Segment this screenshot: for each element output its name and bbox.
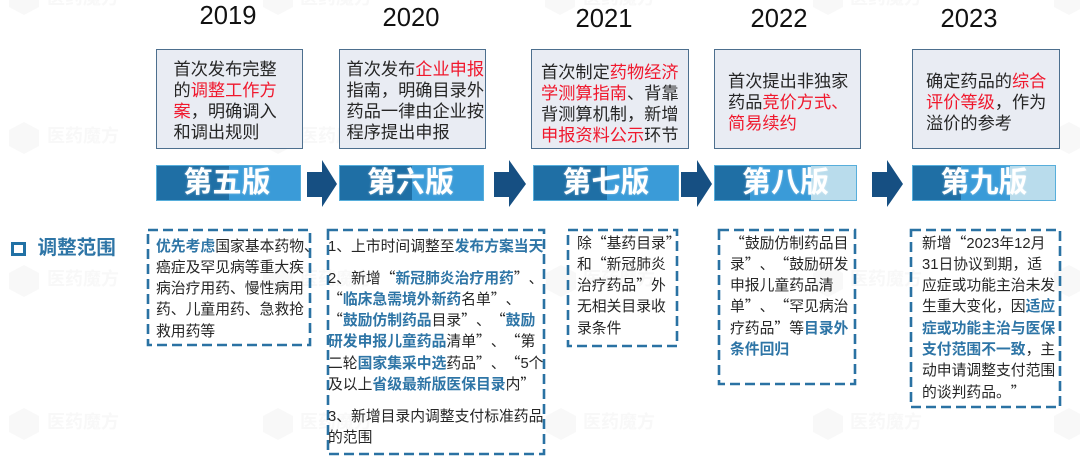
- panel: 第九版 scope: 生重大变化，因适应: [922, 299, 1055, 315]
- watermark pattern: 医药魔方: [583, 411, 655, 432]
- panel: 第九版 scope: 31日协议到期，适: [922, 257, 1042, 273]
- panel: 2020 description: 指南，明确目录外: [346, 80, 484, 100]
- banner: 第八版: [714, 165, 857, 201]
- panel: 2022 description: [714, 49, 861, 149]
- panel: 2022 description: 首次提出非独家: [728, 71, 848, 91]
- panel: 第九版 scope: 应症或功能主治未发: [922, 278, 1055, 294]
- banner: 第九版: 第九版: [940, 167, 1028, 199]
- panel: 第九版 scope: 症或功能主治与医保: [922, 321, 1055, 337]
- panel: 2019 description: 首次发布完整: [174, 58, 277, 78]
- arrow: 第六版 to 第七版: [494, 160, 526, 207]
- panel: 第八版 scope: “鼓励仿制药品目: [730, 232, 848, 252]
- panel: 第六版 scope: 及以上省级最新版医保目录内”: [328, 373, 535, 394]
- panel: 2020 description: 程序提出申报: [346, 122, 450, 142]
- panel: 第六版 scope: 1、上市时间调整至发布方案当天: [328, 238, 543, 254]
- banner: 第六版: 第六版: [367, 167, 454, 199]
- panel: 2023 description: 溢价的参考: [926, 113, 1012, 133]
- panel: 第六版 scope: 的范围: [328, 430, 372, 446]
- watermark pattern: 医药魔方: [47, 125, 119, 146]
- panel: 2021 description: 首次制定药物经济: [541, 62, 679, 82]
- panel: 第五版 scope: 救用药等: [156, 324, 215, 340]
- panel: 第八版 scope: 单”、“罕见病治: [730, 295, 848, 316]
- panel: 第八版 scope: 申报儿童药品清: [730, 278, 834, 294]
- panel: 第六版 scope: 2、新增“新冠肺炎治疗用药”、: [328, 266, 543, 288]
- panel: 第六版 scope: 研发申报儿童药品清单”、“第: [328, 330, 535, 351]
- panel: 第九版 scope: 支付范围不一致，主: [922, 342, 1055, 358]
- panel: 第八版 scope: 疗药品”等目录外: [730, 317, 848, 338]
- panel: 2019 description: 案，明确调入: [174, 100, 277, 120]
- panel: 2023 description: 评价等级，作为: [926, 92, 1046, 112]
- icon: hollow square bullet: [11, 242, 26, 256]
- panel: 第六版 scope: “鼓励仿制药品目录”、“鼓励: [328, 309, 535, 330]
- banner: 第八版: 第八版: [742, 167, 829, 199]
- banner: 第五版: 第五版: [183, 167, 270, 199]
- panel: 第五版 scope: 优先考虑国家基本药物、: [156, 238, 319, 254]
- panel: 第七版 scope: 和“新冠肺炎: [577, 253, 666, 274]
- panel: 2020 description: [339, 49, 486, 149]
- heading: 调整范围: 调整范围: [38, 237, 116, 259]
- panel: 2020 description: 药品一律由企业按: [346, 101, 484, 121]
- panel: 2021 description: [531, 49, 689, 149]
- year 2019: 2019: [200, 2, 256, 30]
- watermark pattern: 医药魔方: [300, 411, 372, 432]
- watermark pattern: 医药魔方: [850, 411, 922, 432]
- panel: 2022 description: 简易续约: [728, 113, 797, 133]
- panel: 2019 description: [156, 49, 303, 149]
- year 2023: 2023: [941, 5, 997, 33]
- panel: 第九版 scope: 动申请调整支付范围: [922, 363, 1055, 379]
- panel: 2022 description: 药品竞价方式、: [728, 92, 848, 112]
- banner: 第九版: [912, 165, 1056, 201]
- year 2020: 2020: [383, 4, 439, 32]
- watermark pattern: 医药魔方: [300, 268, 372, 289]
- panel: 2019 description: 的调整工作方: [174, 80, 277, 100]
- panel: 2019 description: 和调出规则: [174, 122, 259, 142]
- panel: 第七版 scope: 治疗药品”外: [577, 274, 666, 295]
- panel: 第五版 scope: 癌症及罕见病等重大疾: [156, 260, 304, 276]
- watermark pattern: 医药魔方: [47, 268, 119, 289]
- panel: 第五版 scope: 病治疗用药、慢性病用: [156, 281, 304, 297]
- panel: 第九版 scope: 的谈判药品。”: [922, 381, 1026, 402]
- arrow: 第五版 to 第六版: [307, 160, 337, 207]
- watermark pattern: 医药魔方: [47, 411, 119, 432]
- watermark pattern: 医药魔方: [850, 268, 922, 289]
- panel: 2021 description: 背测算机制，新增: [541, 104, 679, 124]
- banner: 第七版: 第七版: [562, 167, 650, 199]
- panel: 2021 description: 学测算指南、背靠: [541, 83, 679, 103]
- arrow: 第七版 to 第八版: [681, 160, 712, 207]
- arrow: 第八版 to 第九版: [872, 160, 903, 207]
- panel: 第六版 scope: 二轮国家集采中选药品”、“5个: [328, 352, 543, 373]
- panel: 第八版 scope: 录”、“鼓励研发: [730, 253, 848, 274]
- panel: 第八版 scope: 条件回归: [730, 342, 789, 358]
- panel: 第六版 scope: 3、新增目录内调整支付标准药品: [328, 409, 543, 425]
- watermark pattern: 医药魔方: [583, 268, 655, 289]
- panel: 2021 description: 申报资料公示环节: [541, 125, 679, 145]
- panel: 2023 description: [912, 49, 1060, 149]
- panel: 第九版 scope: 新增“2023年12月: [922, 232, 1045, 252]
- panel: 第六版 scope: [326, 228, 546, 456]
- panel: 第八版 scope: [718, 228, 856, 386]
- banner: 第六版: [339, 165, 484, 201]
- panel: 2023 description: 确定药品的综合: [926, 71, 1046, 91]
- year 2021: 2021: [576, 5, 632, 33]
- panel: 第七版 scope: 除“基药目录”: [577, 232, 681, 252]
- panel: 第五版 scope: 药、儿童用药、急救抢: [156, 302, 304, 318]
- panel: 第六版 scope: “临床急需境外新药名单”、: [328, 288, 520, 309]
- panel: 第五版 scope: [146, 228, 319, 346]
- banner: 第七版: [533, 165, 679, 201]
- year 2022: 2022: [751, 5, 807, 33]
- panel: 第七版 scope: 无相关目录收: [577, 299, 666, 315]
- panel: 第七版 scope: 录条件: [577, 321, 621, 337]
- panel: 第七版 scope: [566, 228, 681, 348]
- watermark pattern: 医药魔方: [300, 125, 372, 146]
- panel: 2020 description: 首次发布企业申报: [346, 59, 484, 79]
- panel: 第九版 scope: [910, 228, 1062, 408]
- banner: 第五版: [156, 165, 301, 201]
